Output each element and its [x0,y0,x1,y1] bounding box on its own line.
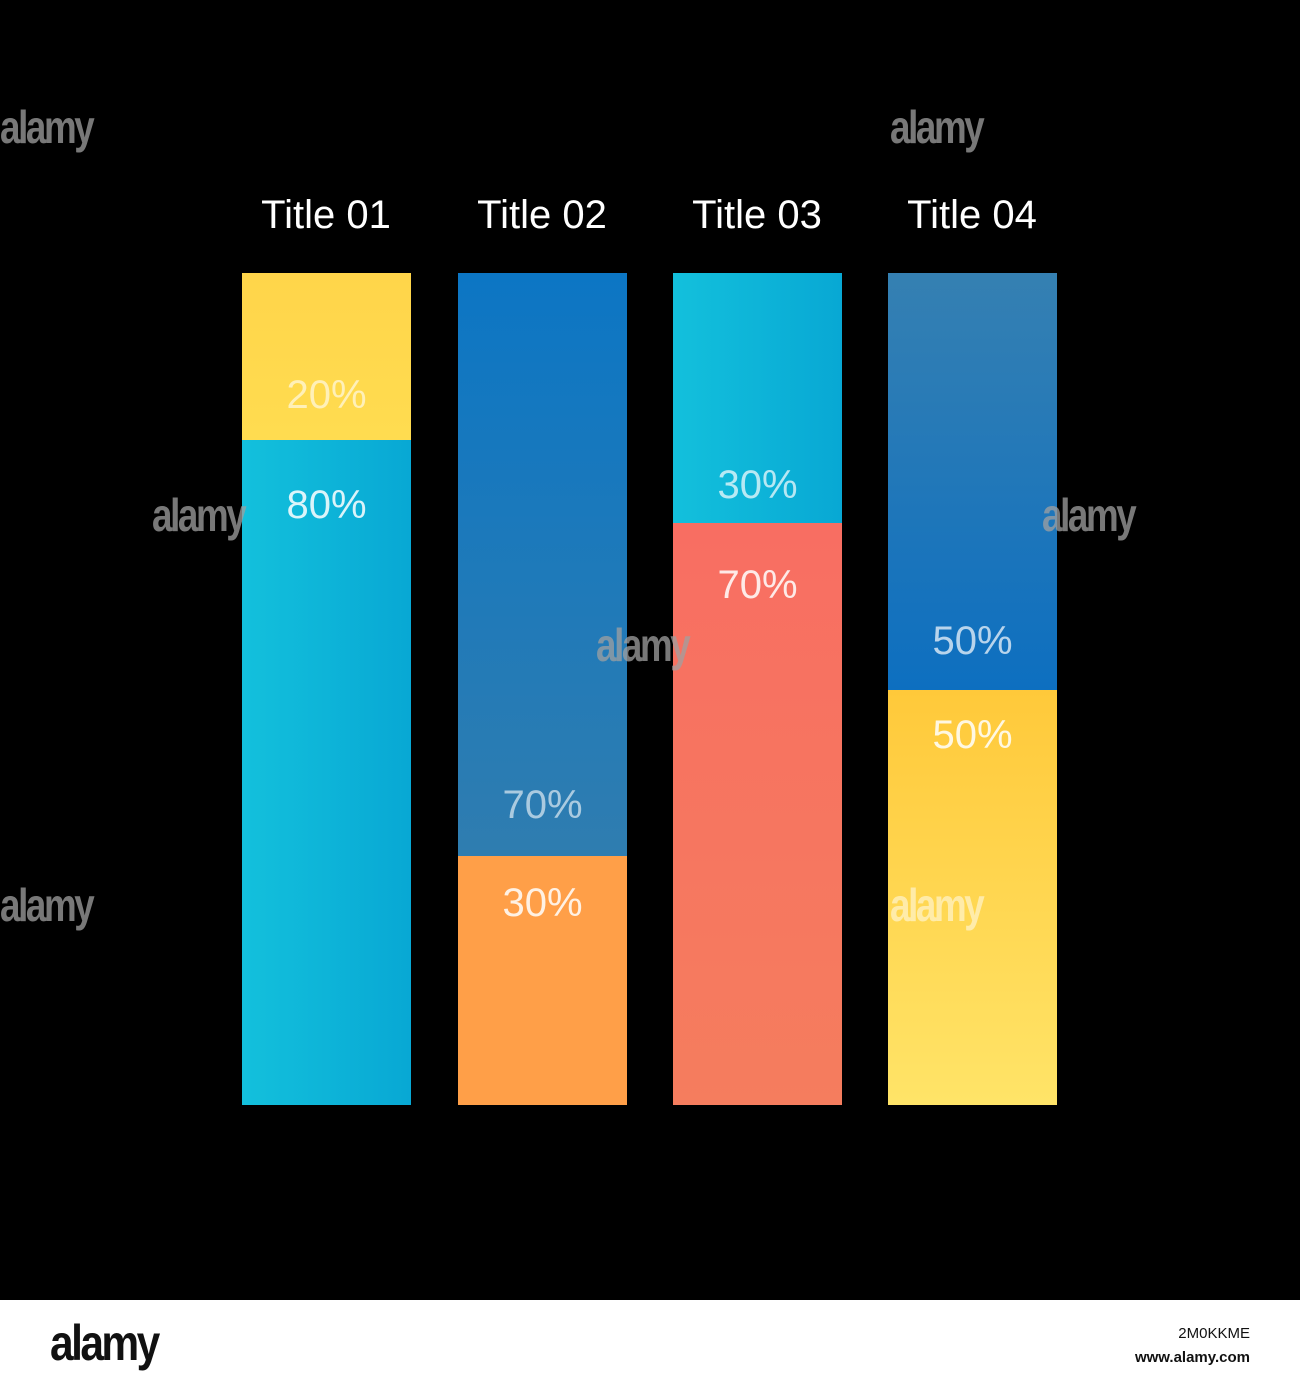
bar 3: 30% [717,463,798,507]
title 04: Title 04 [907,193,1037,237]
title 03: Title 03 [692,193,822,237]
bar 2: 30% [502,881,583,925]
bar 4: 50% [932,619,1013,663]
bar 3 [673,273,842,1105]
image id: 2M0KKME [1178,1325,1250,1342]
text: alamy [0,879,92,931]
bar 1 [242,273,411,1105]
text: alamy [152,489,244,541]
footer strip [0,1300,1300,1390]
title 01: Title 01 [261,193,391,237]
image id [1135,1325,1250,1366]
watermarks [0,101,1136,931]
title 02: Title 02 [477,193,607,237]
footer logo: alamy [50,1315,158,1371]
text: alamy [596,619,688,671]
text: alamy [1042,489,1134,541]
text: alamy [890,879,982,931]
text: alamy [890,101,982,153]
bar 2: 70% [502,783,583,827]
text: alamy [0,101,92,153]
bar 1: 80% [286,483,367,527]
bar 3: 70% [717,563,798,607]
bar 4 [888,273,1057,1105]
image id: www.alamy.com [1135,1349,1250,1366]
bar 4: 50% [932,713,1013,757]
bar 1: 20% [286,373,367,417]
bar 2 [458,273,627,1105]
